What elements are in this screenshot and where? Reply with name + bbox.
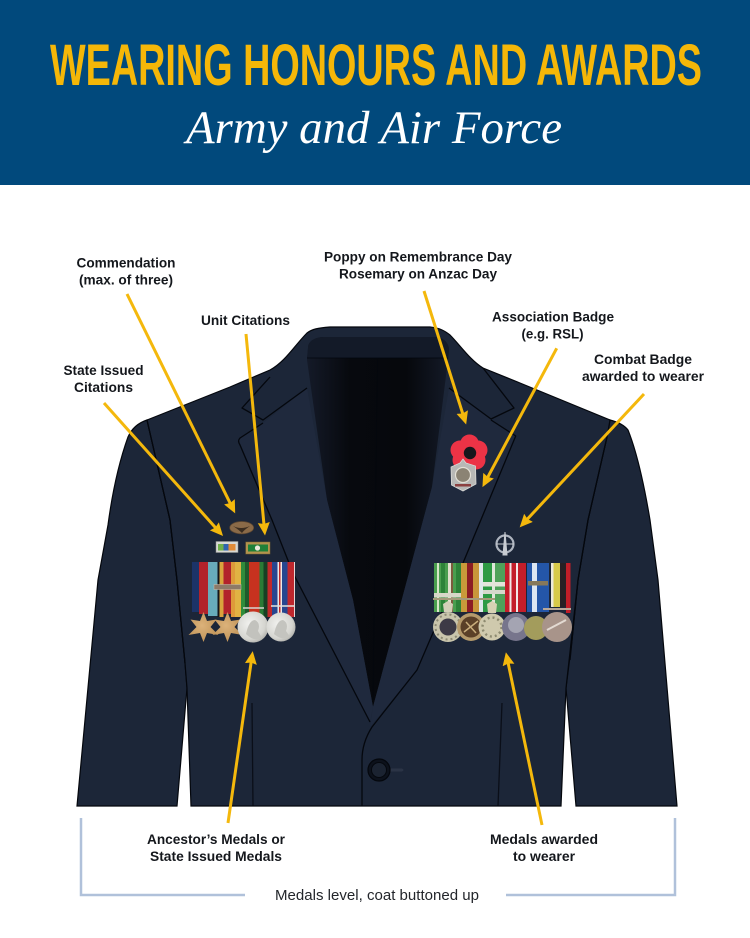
- arrow: association badge: [486, 348, 557, 481]
- silver medal: [238, 608, 268, 642]
- label: ancestor's medals: State Issued Medals: [150, 849, 282, 864]
- association badge: [451, 459, 476, 491]
- coat button: [368, 759, 404, 781]
- label: commendation: (max. of three): [79, 272, 173, 288]
- label: state issued citations: State Issued: [64, 363, 144, 378]
- label: medals awarded: [490, 832, 598, 864]
- poppy: [450, 434, 488, 470]
- label: combat badge: awarded to wearer: [582, 369, 705, 384]
- jacket illustration: [77, 327, 677, 806]
- label: poppy and rosemary: Rosemary on Anzac Day: [339, 266, 497, 282]
- second silver medal: [266, 606, 296, 642]
- left medals: ancestor's or state issued: [188, 522, 296, 642]
- medal 5: [524, 616, 548, 640]
- medal 2: [457, 613, 485, 641]
- right ribbons: [434, 563, 570, 613]
- medal 1: [433, 601, 463, 642]
- label: association badge: (e.g. RSL): [522, 326, 584, 342]
- combat badge: [496, 532, 514, 555]
- label: combat badge: Combat Badge: [594, 352, 692, 367]
- left ribbons: [192, 562, 295, 617]
- label: state issued citations: Citations: [74, 380, 133, 395]
- right medals: awarded to wearer: [433, 563, 572, 642]
- label: state issued citations: [64, 363, 144, 395]
- star medal: [188, 612, 218, 642]
- coat body: [147, 327, 610, 806]
- arrow: state issued citations: [104, 403, 219, 531]
- label: commendation: [76, 256, 176, 288]
- arrow: ancestor's medals: [228, 658, 252, 823]
- inner collar band: [307, 337, 449, 358]
- state issued citation bar: [216, 542, 238, 552]
- left sleeve: [77, 420, 187, 806]
- label: medals awarded: Medals awarded: [490, 832, 598, 847]
- star medal with clasp: [212, 612, 242, 642]
- subtitle: Army and Air Force: [183, 102, 562, 154]
- ribbon clasps: [433, 581, 548, 600]
- bracket caption: Medals level, coat buttoned up: [275, 887, 479, 904]
- label: ancestor's medals: [147, 832, 286, 864]
- arrow: unit citations: [246, 334, 264, 529]
- right sleeve: [566, 420, 677, 806]
- medal 4: [502, 613, 530, 641]
- left lapel: [238, 388, 373, 722]
- poppy and association badge: [450, 434, 488, 491]
- bracket: medals level: [81, 818, 675, 904]
- medal 6: [542, 608, 572, 642]
- label: medals awarded: to wearer: [513, 849, 576, 864]
- label: association badge: [492, 310, 614, 342]
- unit citation bar: [246, 542, 270, 554]
- arrow: medals awarded: [507, 659, 542, 825]
- label: ancestor's medals: Ancestor’s Medals or: [147, 832, 286, 847]
- label: combat badge: [582, 352, 705, 384]
- arrow: poppy: [424, 291, 464, 418]
- arrow: commendation: [127, 294, 232, 508]
- label: unit citations: Unit Citations: [201, 313, 290, 328]
- shirt opening: [307, 337, 449, 707]
- commendation badge: [230, 522, 254, 534]
- header banner: [0, 0, 750, 185]
- right lapel: [370, 388, 516, 727]
- label: poppy and rosemary: Poppy on Remembrance Day: [324, 250, 512, 264]
- label: poppy and rosemary: [324, 250, 512, 282]
- arrow: combat badge: [524, 394, 644, 523]
- medal 3: [478, 601, 506, 640]
- label: commendation: Commendation: [76, 256, 176, 270]
- label: association badge: Association Badge: [492, 310, 614, 324]
